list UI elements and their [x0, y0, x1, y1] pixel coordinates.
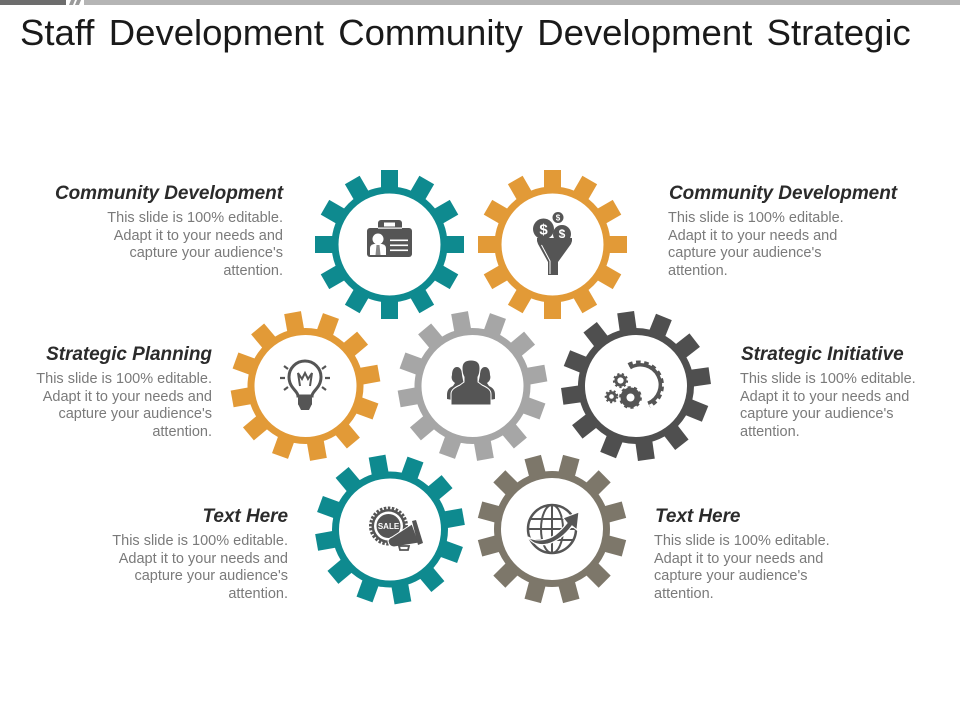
text block: text here right	[654, 506, 830, 602]
text block: community development right: This slide is 100% editable.	[668, 210, 844, 226]
icon: sale megaphone: SALE	[378, 522, 400, 531]
text block: community development right: capture your audience's	[668, 245, 822, 261]
text block: strategic planning: attention.	[152, 424, 212, 440]
text block: strategic planning: Adapt it to your needs and	[43, 389, 212, 405]
icon: id badge	[367, 220, 412, 257]
gear: taupe bottom right	[461, 438, 643, 620]
text block: community development left: attention.	[223, 263, 283, 279]
text block: community development right: attention.	[668, 263, 728, 279]
text block: community development left	[55, 182, 284, 279]
text block: community development left: This slide is 100% editable.	[107, 210, 283, 226]
icon: money funnel	[533, 212, 572, 275]
icon: gears cluster	[606, 362, 662, 408]
text block: text here right: Adapt it to your needs and	[654, 551, 823, 567]
text block: strategic initiative: This slide is 100% editable.	[740, 371, 916, 387]
gear: grey center	[386, 300, 559, 472]
text block: community development right: Adapt it to your needs and	[668, 228, 837, 244]
icon: money funnel: $	[556, 214, 561, 222]
text block: text here left: capture your audience's	[134, 568, 288, 584]
text block: strategic initiative: Strategic Initiative	[741, 344, 904, 364]
text block: community development right	[668, 182, 898, 279]
icon: people	[447, 360, 495, 405]
text block: strategic initiative: capture your audience's	[740, 406, 894, 422]
gear: teal top left	[315, 170, 464, 319]
text block: community development right: Community Development	[669, 182, 897, 204]
text block: text here left: Adapt it to your needs and	[119, 551, 288, 567]
text block: text here left	[112, 506, 288, 602]
text block: strategic planning: Strategic Planning	[46, 344, 212, 364]
icon: money funnel: $	[539, 222, 548, 238]
text block: text here right: This slide is 100% editable.	[654, 533, 830, 549]
header bar	[0, 0, 960, 5]
text block: text here left: attention.	[228, 586, 288, 602]
text block: text here right: capture your audience's	[654, 568, 808, 584]
title: Staff Development Community Development Strategic	[20, 12, 911, 53]
text block: strategic initiative: attention.	[740, 424, 800, 440]
text block: strategic planning: capture your audience's	[58, 406, 212, 422]
text block: text here right: Text Here	[655, 506, 740, 526]
gear: dark right	[552, 302, 720, 470]
icon: money funnel: $	[559, 227, 566, 241]
text block: strategic planning: This slide is 100% editable.	[36, 371, 212, 387]
text block: community development left: Community Development	[55, 182, 283, 204]
text block: text here right: attention.	[654, 586, 714, 602]
icon: globe with arrow	[528, 505, 579, 553]
text block: strategic initiative: Adapt it to your needs and	[740, 389, 909, 405]
icon: sale megaphone	[370, 508, 423, 550]
text block: community development left: capture your audience's	[129, 245, 283, 261]
text block: text here left: Text Here	[203, 506, 288, 526]
text block: text here left: This slide is 100% editable.	[112, 533, 288, 549]
text block: community development left: Adapt it to your needs and	[114, 228, 283, 244]
text block: strategic planning	[36, 344, 212, 440]
gear: teal bottom left	[304, 443, 476, 616]
icon: light bulb	[280, 361, 330, 410]
gear: orange top right	[478, 170, 627, 319]
gear: orange middle left	[219, 300, 392, 472]
text block: strategic initiative	[740, 344, 916, 440]
